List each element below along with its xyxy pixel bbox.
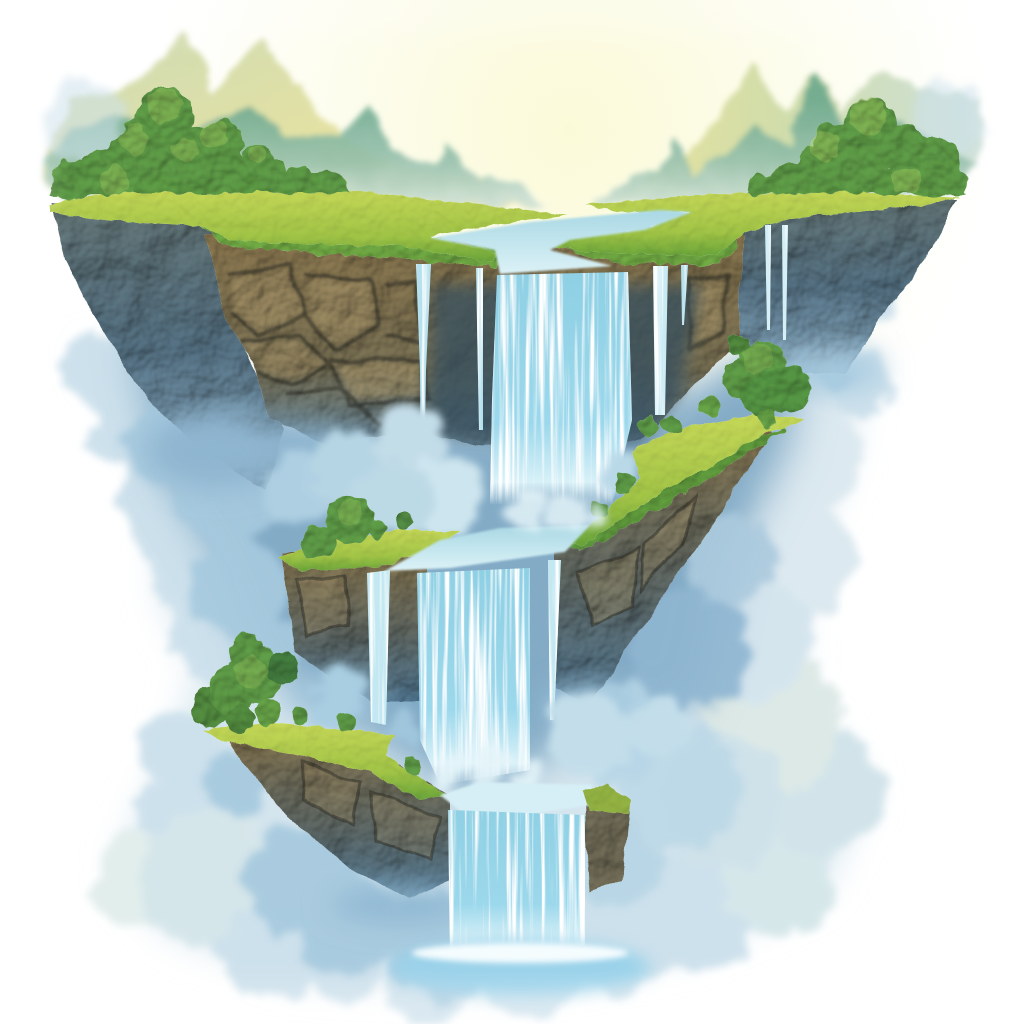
middle blue clouds [125,350,850,1000]
right cliff, far blue rock [725,200,958,375]
thin falls upper [416,225,788,495]
mid-left grass island [277,530,460,571]
mid mist band [262,409,642,540]
ledge fringe [565,425,790,552]
lower-right grass [582,785,632,815]
tree line top right [745,98,968,197]
right diagonal cliff [555,425,775,705]
mid pool [385,525,590,571]
splash pool at bottom [390,940,650,996]
lower mist [310,670,690,777]
central brown cliff [205,235,745,445]
right diagonal grass ledge [565,414,805,552]
lower pool [440,782,592,816]
lower cliff base mist [330,887,470,923]
spray at the foot of main waterfall [436,490,605,792]
mid thin falls [367,560,561,725]
lower waterfall [448,810,585,955]
lower cliff [225,730,630,898]
mist over mid cliff bases [285,677,635,725]
top river [430,210,692,274]
distant mountains right [590,65,985,205]
tree line top left [50,87,350,200]
trees mid-left [301,496,412,559]
mist over upper cliff bases [145,350,885,488]
left cliff, far blue rock [52,205,285,490]
grass fringe [200,226,500,268]
boulder facets [232,270,726,400]
deep blue mist mass behind the cliffs [130,330,800,800]
top grass left [50,188,568,268]
pale haze silhouette under all clouds [85,340,865,985]
lower-left trees [190,634,423,777]
rock cracks [228,265,730,425]
trees right ledge [591,335,811,519]
top grass right [552,190,960,266]
distant mountains left [40,28,545,215]
main waterfall [490,272,632,505]
dark recess behind main waterfall [430,285,700,445]
right grass fringe [555,228,745,266]
mid left cliff [283,555,425,700]
lower-left grass ledge [203,722,447,800]
mid main waterfall [417,568,530,785]
